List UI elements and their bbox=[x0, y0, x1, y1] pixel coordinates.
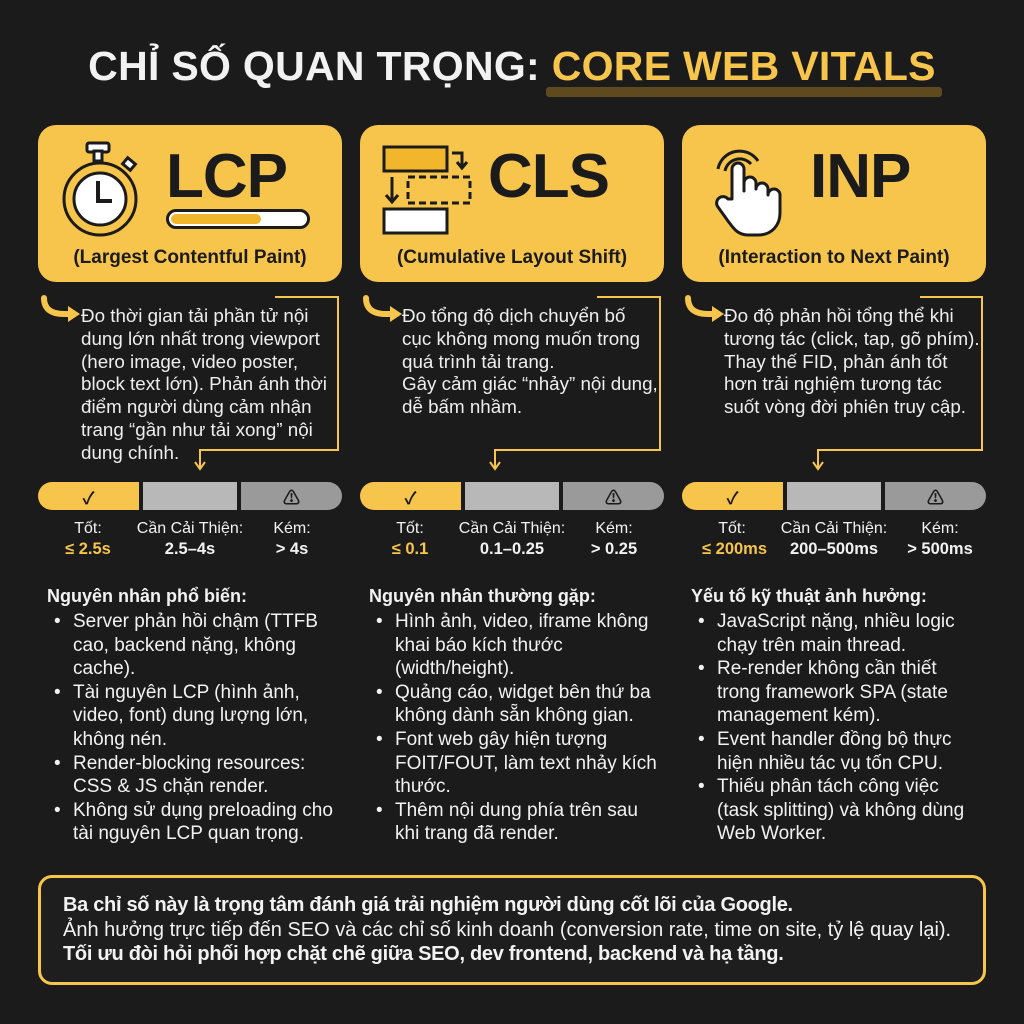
text block: LCP description: Đo thời gian tải phần tử nội bbox=[81, 305, 308, 326]
text block: CLS description bbox=[402, 305, 658, 417]
text: ≤ 0.1 bbox=[392, 540, 428, 558]
labels: LCP thresholds bbox=[65, 520, 311, 558]
section: INP factors: Yếu tố kỹ thuật ảnh hưởng: bbox=[691, 586, 927, 606]
section: INP factors: Re-render không cần thiết bbox=[717, 658, 937, 679]
text: Tốt: bbox=[718, 520, 746, 537]
section: CLS causes: không dành sẵn không gian. bbox=[395, 705, 634, 726]
threshold bar: LCP bbox=[38, 482, 342, 510]
section: LCP causes: tài nguyên LCP quan trọng. bbox=[73, 823, 304, 844]
section: CLS causes: FOIT/FOUT, làm text nhảy kích bbox=[395, 753, 657, 774]
section: LCP causes: Không sử dụng preloading cho bbox=[73, 800, 333, 821]
icon: tap hand bbox=[715, 150, 782, 236]
section: LCP causes: CSS & JS chặn render. bbox=[73, 776, 268, 797]
threshold bar: INP: ✓ bbox=[726, 488, 739, 508]
section: LCP causes: cao, backend nặng, không bbox=[73, 635, 296, 656]
text: > 500ms bbox=[907, 540, 973, 558]
text block: CLS description: cục không mong muốn trong bbox=[402, 328, 640, 349]
section: LCP causes: cache). bbox=[73, 658, 135, 679]
panel: LCP card bbox=[38, 125, 342, 282]
section: INP factors: JavaScript nặng, nhiều logic bbox=[717, 611, 955, 632]
progress bar bbox=[166, 209, 310, 229]
text: 200–500ms bbox=[790, 540, 878, 558]
text: Kém: bbox=[595, 520, 633, 537]
labels: CLS thresholds bbox=[392, 520, 637, 558]
section: LCP causes: không nén. bbox=[73, 729, 167, 750]
text block: CLS description: Gây cảm giác “nhảy” nội dung, bbox=[402, 373, 658, 394]
section: LCP causes: video, font) dung lượng lớn, bbox=[73, 705, 308, 726]
text block: INP description: tương tác (click, tap, gõ phím). bbox=[724, 328, 980, 349]
section: INP factors: hiện nhiều tác vụ tốn CPU. bbox=[717, 753, 943, 774]
threshold bar: CLS: ✓ bbox=[404, 488, 417, 508]
title: CHỈ SỐ QUAN TRỌNG: CORE WEB VITALS bbox=[88, 43, 936, 89]
text: Cần Cải Thiện: bbox=[459, 520, 565, 537]
section: INP factors: Thiếu phân tách công việc bbox=[717, 776, 939, 797]
text: > 4s bbox=[276, 540, 308, 558]
panel: LCP card: LCP bbox=[166, 142, 287, 211]
text block: CLS description: dễ bấm nhầm. bbox=[402, 396, 522, 417]
section: CLS causes: Thêm nội dung phía trên sau bbox=[395, 800, 638, 821]
section: INP factors: management kém). bbox=[717, 705, 881, 726]
section: LCP causes: Nguyên nhân phổ biến: bbox=[47, 586, 247, 606]
section: LCP causes bbox=[47, 586, 333, 844]
text block: INP description: hơn trải nghiệm tương tác bbox=[724, 373, 942, 394]
section: LCP causes: Render-blocking resources: bbox=[73, 753, 305, 774]
text: Tốt: bbox=[396, 520, 424, 537]
section: INP factors: (task splitting) và không dùng bbox=[717, 800, 964, 821]
panel: INP card: (Interaction to Next Paint) bbox=[718, 247, 950, 268]
section: CLS causes: thước. bbox=[395, 776, 451, 797]
text: Kém: bbox=[273, 520, 311, 537]
text: Cần Cải Thiện: bbox=[781, 520, 887, 537]
callout: summary box: Tối ưu đòi hỏi phối hợp chặt chẽ giữa SEO, dev frontend, backend và hạ tầng. bbox=[63, 943, 783, 965]
text: 0.1–0.25 bbox=[480, 540, 544, 558]
section: CLS causes: Font web gây hiện tượng bbox=[395, 729, 607, 750]
callout: summary box bbox=[38, 875, 986, 985]
text: Cần Cải Thiện: bbox=[137, 520, 243, 537]
panel: CLS card bbox=[360, 125, 664, 282]
callout: summary box: Ba chỉ số này là trọng tâm đánh giá trải nghiệm người dùng cốt lõi của Google. bbox=[63, 894, 793, 916]
section: LCP causes: Tài nguyên LCP (hình ảnh, bbox=[73, 682, 300, 703]
text block: INP description: suốt vòng đời phiên truy cập. bbox=[724, 396, 966, 417]
section: INP factors: trong framework SPA (state bbox=[717, 682, 948, 703]
section: CLS causes: khi trang đã render. bbox=[395, 823, 559, 844]
panel: LCP card: (Largest Contentful Paint) bbox=[73, 247, 307, 268]
panel: CLS card: (Cumulative Layout Shift) bbox=[397, 247, 627, 268]
text block: INP description bbox=[724, 305, 980, 417]
text block: LCP description: (hero image, video poster, bbox=[81, 351, 298, 372]
text: Kém: bbox=[921, 520, 959, 537]
text: Tốt: bbox=[74, 520, 102, 537]
panel: CLS card: CLS bbox=[488, 142, 609, 211]
threshold bar: INP bbox=[682, 482, 986, 510]
section: LCP causes: Server phản hồi chậm (TTFB bbox=[73, 611, 318, 632]
threshold bar: CLS: ⚠ bbox=[605, 488, 622, 508]
text block: LCP description: điểm người dùng cảm nhận bbox=[81, 396, 312, 417]
section: INP factors: chạy trên main thread. bbox=[717, 635, 906, 656]
section: INP factors: Event handler đồng bộ thực bbox=[717, 729, 952, 750]
section: INP factors bbox=[691, 586, 964, 844]
section: CLS causes: Quảng cáo, widget bên thứ ba bbox=[395, 682, 651, 703]
text block: LCP description: dung chính. bbox=[81, 442, 179, 463]
callout: summary box: Ảnh hưởng trực tiếp đến SEO và các chỉ số kinh doanh (conversion rate, time on site, tỷ lệ quay lại). bbox=[63, 918, 951, 940]
section: CLS causes: Nguyên nhân thường gặp: bbox=[369, 586, 596, 606]
icon: layout shift bbox=[382, 146, 472, 234]
icon: stopwatch bbox=[62, 142, 138, 236]
section: CLS causes: Hình ảnh, video, iframe không bbox=[395, 611, 648, 632]
section: CLS causes bbox=[369, 586, 657, 844]
text block: INP description: Đo độ phản hồi tổng thể khi bbox=[724, 305, 954, 326]
text: > 0.25 bbox=[591, 540, 637, 558]
threshold bar: LCP: ✓ bbox=[82, 488, 95, 508]
threshold bar: CLS bbox=[360, 482, 664, 510]
panel: INP card bbox=[682, 125, 986, 282]
threshold bar: LCP: ⚠ bbox=[283, 488, 300, 508]
text: ≤ 2.5s bbox=[65, 540, 111, 558]
section: INP factors: Web Worker. bbox=[717, 823, 826, 844]
text block: INP description: Thay thế FID, phản ánh tốt bbox=[724, 351, 947, 372]
text block: LCP description: dung lớn nhất trong viewport bbox=[81, 328, 320, 349]
labels: INP thresholds bbox=[702, 520, 973, 558]
text block: LCP description: trang “gần như tải xong” nội bbox=[81, 419, 313, 440]
text block: CLS description: Đo tổng độ dịch chuyển bố bbox=[402, 305, 625, 326]
text block: LCP description bbox=[81, 305, 327, 463]
section: CLS causes: (width/height). bbox=[395, 658, 514, 679]
connectors: arrows and lines bbox=[41, 295, 983, 471]
section: CLS causes: khai báo kích thước bbox=[395, 635, 563, 656]
text: 2.5–4s bbox=[165, 540, 215, 558]
threshold bar: INP: ⚠ bbox=[927, 488, 944, 508]
panel: INP card: INP bbox=[810, 142, 910, 211]
text block: CLS description: quá trình tải trang. bbox=[402, 351, 554, 372]
text: ≤ 200ms bbox=[702, 540, 767, 558]
text block: LCP description: block text lớn). Phản ánh thời bbox=[81, 373, 327, 394]
